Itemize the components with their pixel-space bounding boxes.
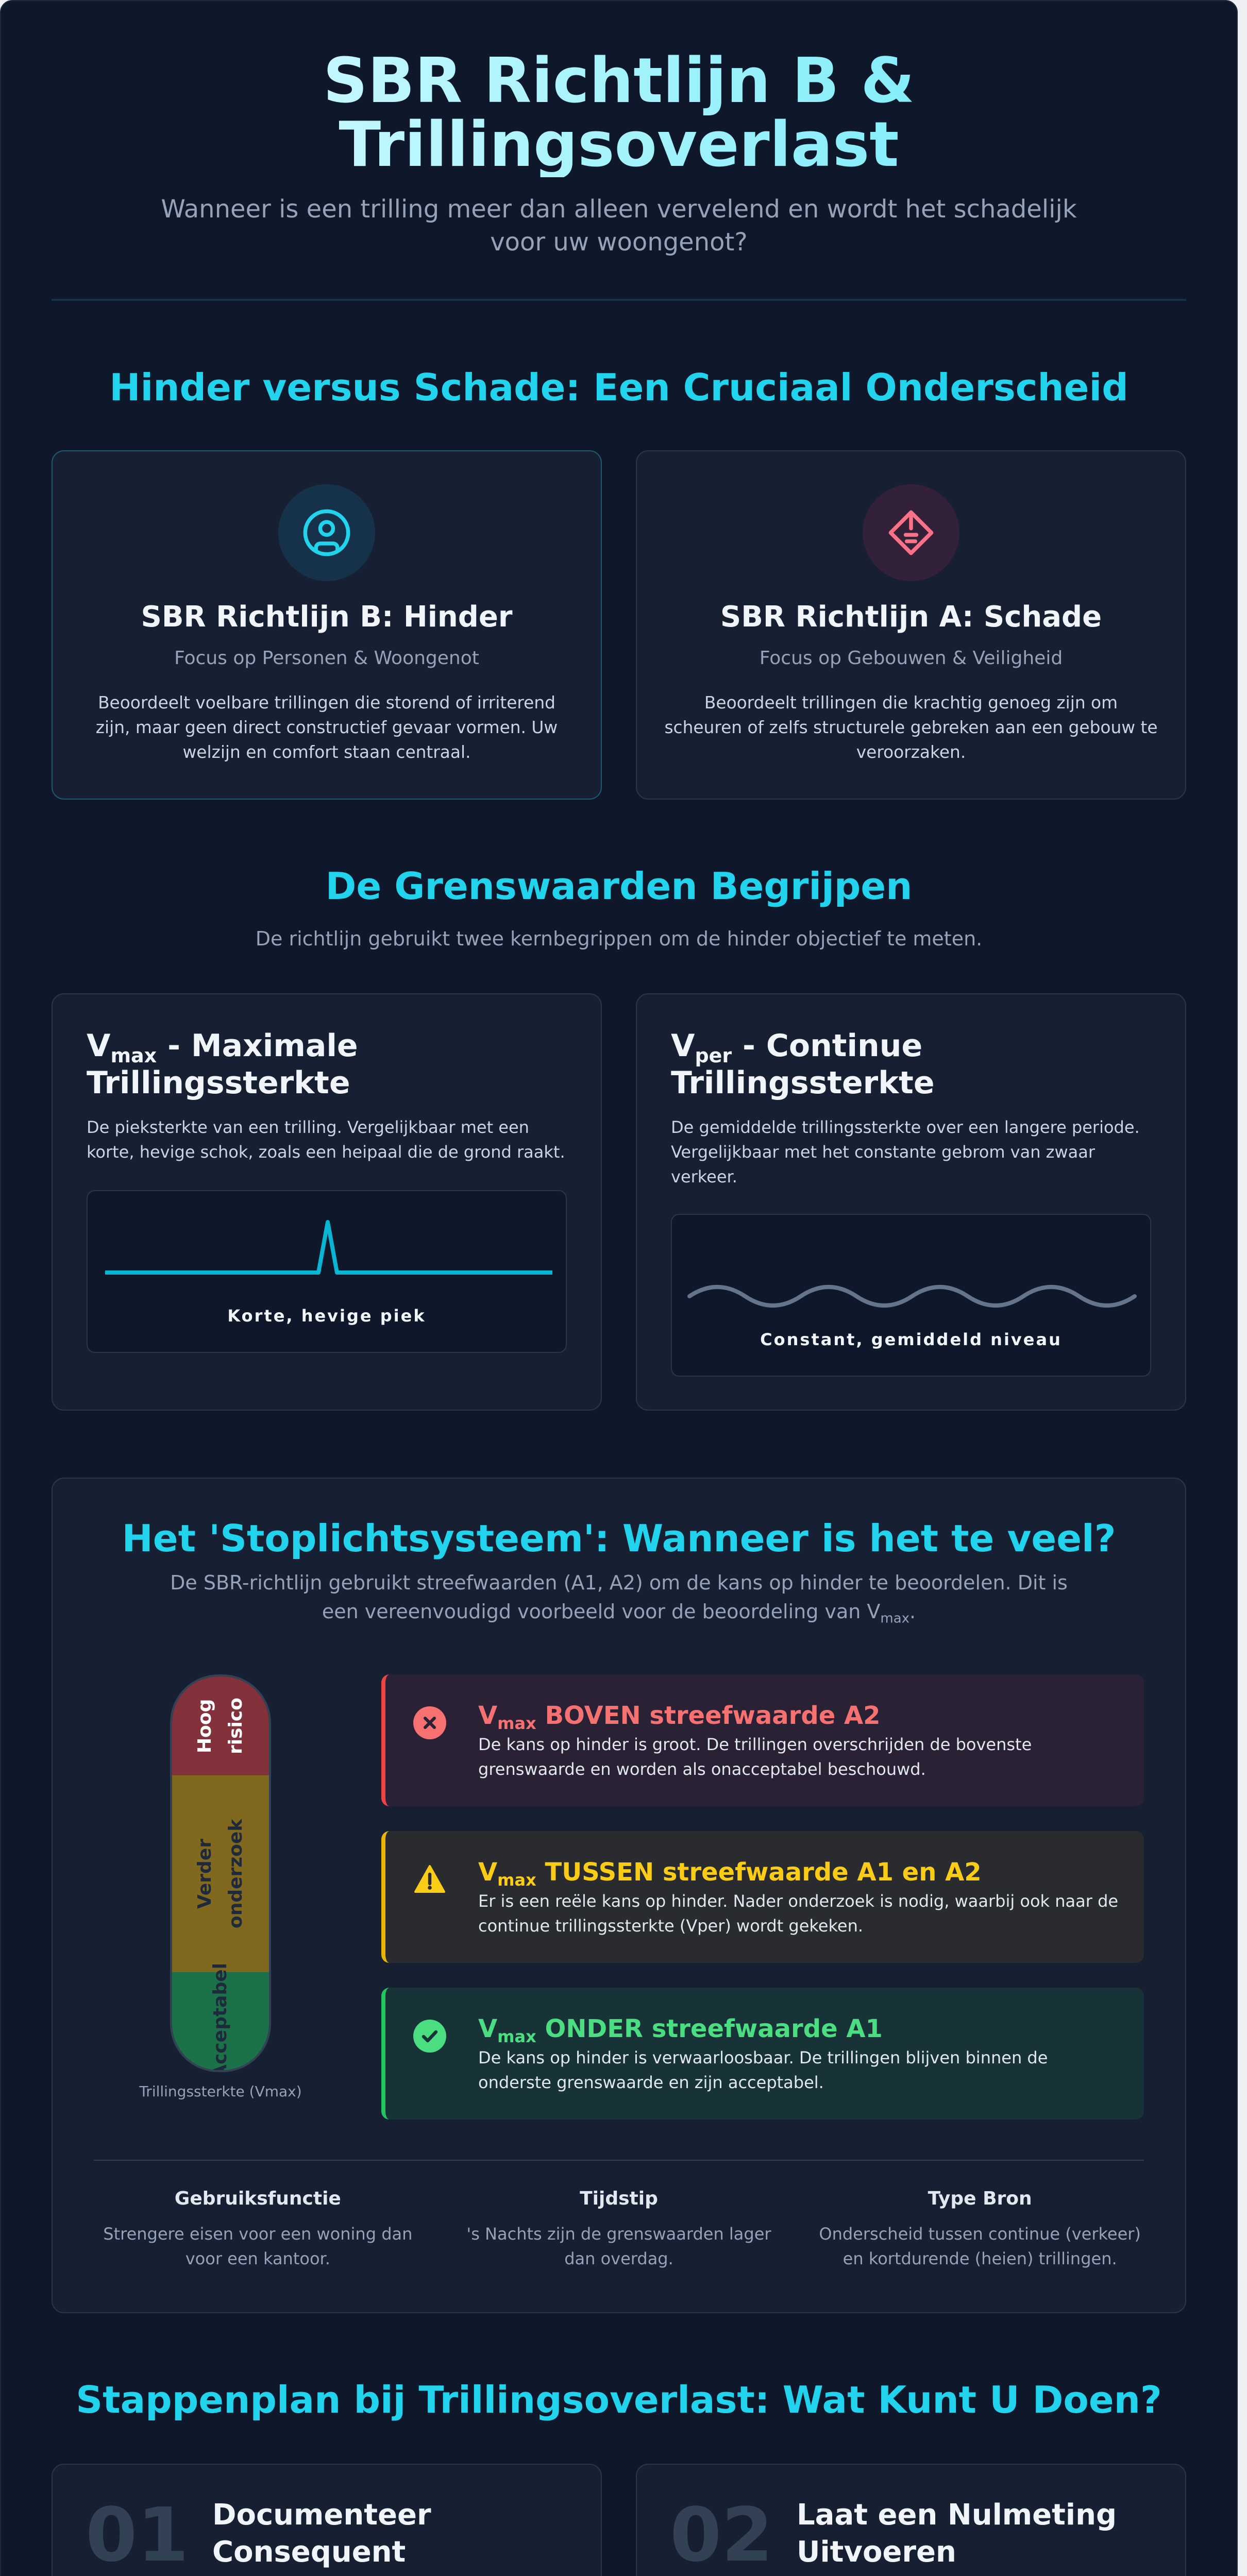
card text: Beoordeelt trillingen die krachtig genoeg zijn om: [704, 693, 1118, 713]
box: tussen A1 en A2: Er is een reële kans op hinder. Nader onderzoek is nodig, waarbij ook naar de continue trillingssterkte (Vper) wordt gekeken.: [478, 1891, 1118, 1936]
scale label: Trillingssterkte (Vmax): [139, 2083, 302, 2100]
icon: x circle: [413, 1706, 446, 1739]
icon: check circle: [413, 2020, 446, 2053]
factor: tijdstip: 's Nachts zijn de grenswaarden lager dan overdag.: [466, 2224, 771, 2268]
segment: hoog risico: [172, 1676, 269, 1775]
step 02: Laat een Nulmeting Uitvoeren: [797, 2498, 1117, 2569]
heading: stappenplan: Stappenplan bij Trillingsoverlast: Wat Kunt U Doen?: [76, 2378, 1162, 2421]
factor: type bron: Type Bron: [928, 2188, 1032, 2209]
step 02: [636, 2464, 1186, 2576]
card: richtlijn B hinder: [52, 450, 602, 800]
segment: acceptabel: [172, 1972, 269, 2070]
step 01: [52, 2464, 602, 2576]
traffic light scale: [139, 1674, 302, 2100]
assessment boxes: [381, 1674, 1144, 2120]
factor: gebruiksfunctie: Strengere eisen voor een woning dan voor een kantoor.: [103, 2224, 412, 2268]
panel: steps: [52, 2464, 1186, 2576]
card text: scheuren of zelfs structurele gebreken aan een gebouw te: [664, 718, 1158, 737]
title: Trillingsoverlast: [339, 109, 899, 181]
card text: [96, 693, 558, 762]
card text: zijn, maar geen direct constructief gevaar vormen. Uw: [96, 718, 558, 737]
chart: spike: Korte, hevige piek: [227, 1306, 426, 1326]
heading: grenswaarden: De Grenswaarden Begrijpen: [326, 865, 912, 908]
section subtitle: De richtlijn gebruikt twee kernbegrippen om de hinder objectief te meten.: [256, 927, 982, 950]
card subtitle: Focus op Gebouwen & Veiligheid: [760, 648, 1063, 669]
chart: spike: [87, 1190, 567, 1353]
factors row: [94, 2160, 1144, 2271]
card text: De pieksterkte van een trilling. Vergelijkbaar met een korte, hevige schok, zoals een heipaal die de grond raakt.: [87, 1117, 565, 1162]
subtitle: De SBR-richtlijn gebruikt streefwaarden (A1, A2) om de kans op hinder te beoordelen. Dit is een vereenvoudigd voorbeeld voor de beoordeling van Vmax.: [170, 1571, 1068, 1626]
step 01: Documenteer Consequent: [212, 2498, 431, 2569]
card text: [664, 693, 1158, 762]
box: boven A2: De kans op hinder is groot. De trillingen overschrijden de bovenste grenswaarde en worden als onacceptabel beschouwd.: [478, 1735, 1032, 1779]
card title: Vmax - Maximale Trillingssterkte: [87, 1028, 358, 1101]
segment: verder onderzoek: Verder onderzoek: [194, 1819, 246, 1928]
card text: Beoordeelt voelbare trillingen die storend of irriterend: [98, 693, 555, 713]
card title: SBR Richtlijn B: Hinder: [141, 600, 512, 634]
subtitle: Wanneer is een trilling meer dan alleen vervelend en wordt het schadelijk voor uw woongenot?: [161, 195, 1077, 257]
box: onder A1: [381, 1988, 1144, 2120]
icon: warning triangle: [414, 1865, 445, 1893]
step 02: 02: [670, 2492, 773, 2576]
segment: verder onderzoek: [172, 1775, 269, 1972]
heading: Het 'Stoplichtsysteem': Wanneer is het te veel?: [122, 1517, 1116, 1560]
icon: structural warning diamond: [863, 484, 959, 581]
card subtitle: Focus op Personen & Woongenot: [174, 648, 479, 669]
box: boven A2: [381, 1674, 1144, 1806]
card title: SBR Richtlijn A: Schade: [720, 600, 1102, 634]
title: [52, 49, 1186, 177]
card text: De gemiddelde trillingssterkte over een langere periode. Vergelijkbaar met het constante gebrom van zwaar verkeer.: [671, 1117, 1140, 1187]
chart: wave: [671, 1214, 1151, 1377]
box: onder A1: De kans op hinder is verwaarloosbaar. De trillingen blijven binnen de onderste grenswaarde en zijn acceptabel.: [478, 2048, 1048, 2092]
panel: hinder vs schade cards: [52, 450, 1186, 800]
title: SBR Richtlijn B &: [323, 45, 915, 117]
card: Vper: [636, 993, 1186, 1411]
box: boven A2: Vmax BOVEN streefwaarde A2: [478, 1701, 881, 1733]
box: tussen A1 en A2: Vmax TUSSEN streefwaarde A1 en A2: [478, 1858, 982, 1890]
factor: tijdstip: Tijdstip: [580, 2188, 658, 2209]
factor: type bron: [819, 2188, 1141, 2268]
card text: veroorzaken.: [856, 742, 966, 762]
factor: gebruiksfunctie: [103, 2188, 412, 2268]
chart: wave: Constant, gemiddeld niveau: [760, 1330, 1062, 1349]
panel: stoplichtsysteem: [52, 1478, 1186, 2313]
box: onder A1: Vmax ONDER streefwaarde A1: [478, 2014, 883, 2046]
card text: welzijn en comfort staan centraal.: [182, 742, 471, 762]
icon: person circle: [278, 484, 375, 581]
panel: grenswaarden cards: [52, 993, 1186, 1411]
heading: hinder versus schade: Hinder versus Schade: Een Cruciaal Onderscheid: [109, 366, 1128, 409]
card title: Vper - Continue Trillingssterkte: [671, 1028, 935, 1101]
step 01: 01: [86, 2492, 189, 2576]
card: richtlijn A schade: [636, 450, 1186, 800]
factor: tijdstip: [466, 2188, 771, 2268]
factor: gebruiksfunctie: Gebruiksfunctie: [175, 2188, 341, 2209]
box: tussen A1 en A2: [381, 1831, 1144, 1963]
segment: hoog risico: Hoog risico: [194, 1698, 246, 1754]
card: Vmax: [52, 993, 602, 1411]
factor: type bron: Onderscheid tussen continue (verkeer) en kortdurende (heien) trillingen.: [819, 2224, 1141, 2268]
